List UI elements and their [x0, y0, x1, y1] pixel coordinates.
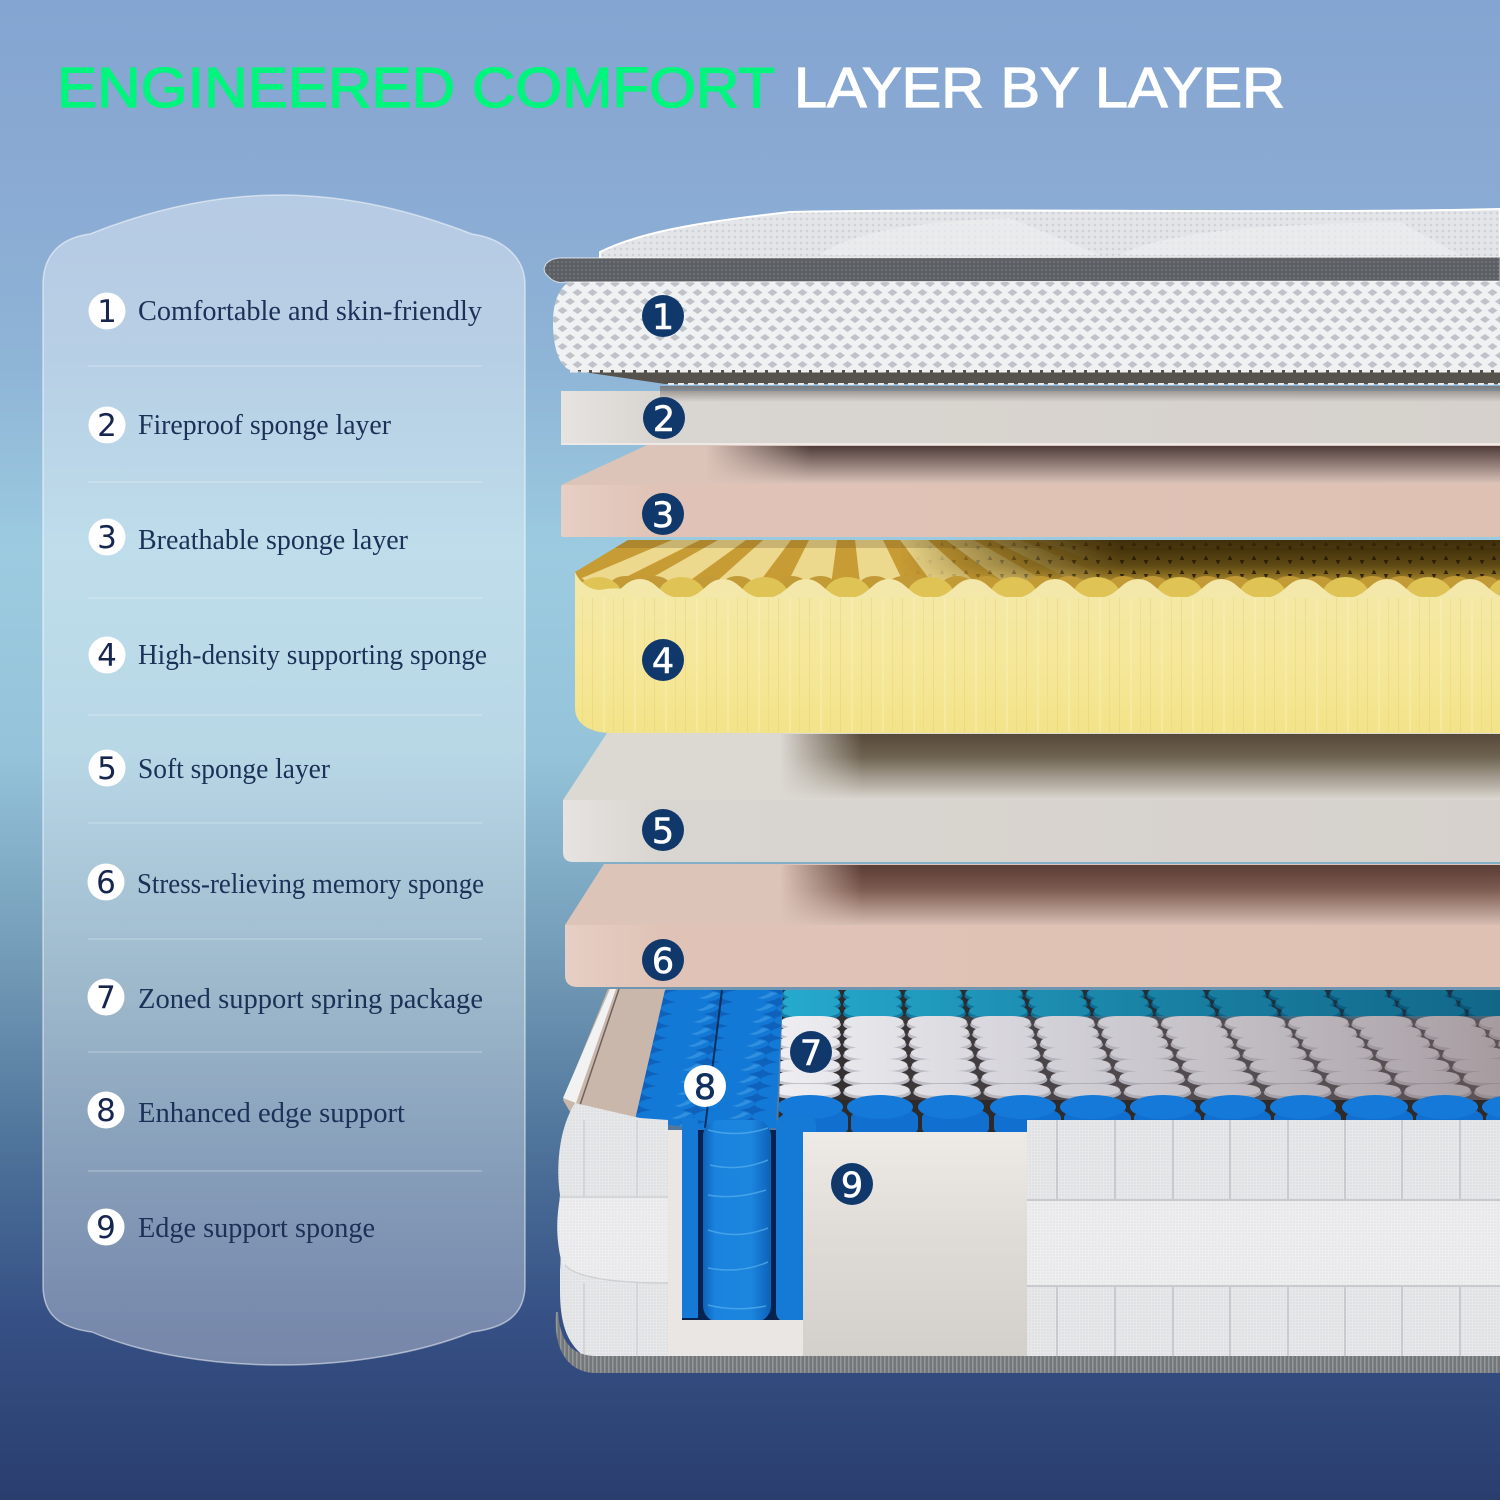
- badge 2: 2: [653, 400, 675, 440]
- legend item 5: 5: [97, 751, 117, 787]
- badge 8: 8: [694, 1068, 716, 1108]
- legend item 5: Soft sponge layer: [138, 754, 331, 785]
- badge 6: 6: [652, 942, 674, 982]
- legend item 5: [88, 750, 331, 787]
- layer 2: fireproof sponge: [561, 386, 1500, 445]
- badge 8: [684, 1065, 726, 1108]
- blue front spring row: [778, 1095, 1500, 1132]
- badge 5: [642, 809, 684, 852]
- legend item 3: [88, 518, 409, 556]
- legend item 8: [88, 1092, 405, 1129]
- badge 3: 3: [652, 496, 674, 536]
- badge 9: [831, 1163, 873, 1206]
- badge 4: 4: [652, 642, 674, 682]
- badge 1: 1: [652, 298, 674, 338]
- layer 4: high-density yellow foam: [530, 538, 1500, 733]
- badge 5: 5: [652, 812, 674, 852]
- legend item 9: 9: [96, 1210, 116, 1246]
- layer 3: breathable sponge: [561, 445, 1500, 537]
- exposed blue springs: [682, 1115, 816, 1322]
- edge support springs, rear: [635, 990, 783, 1130]
- badge 7: [790, 1031, 832, 1074]
- legend item 1: Comfortable and skin-friendly: [138, 296, 482, 327]
- badge 6: [642, 939, 684, 982]
- right fabric border: [1027, 1120, 1500, 1357]
- bottom piping: [556, 1312, 1500, 1373]
- zoned pocket springs: [777, 986, 1500, 1140]
- white foam floor: [668, 1320, 1030, 1357]
- legend item 4: 4: [97, 638, 117, 674]
- badge 1: [642, 295, 684, 338]
- layer 7-9: spring base: [556, 986, 1500, 1373]
- badge 4: [642, 639, 684, 682]
- left fabric border: [557, 1103, 682, 1357]
- title: [57, 56, 1285, 120]
- badge 2: [643, 397, 685, 440]
- title: ENGINEERED COMFORT: [57, 56, 775, 120]
- mattress number badges: [642, 295, 873, 1206]
- layer 6: memory sponge: [565, 864, 1500, 987]
- panel: layer legend: [43, 195, 525, 1365]
- legend item 2: 2: [97, 408, 117, 444]
- edge support sponge block: [803, 1132, 1027, 1357]
- badge 9: 9: [841, 1166, 863, 1206]
- legend item 2: Fireproof sponge layer: [138, 410, 392, 441]
- legend item 3: 3: [97, 520, 117, 556]
- teal spring rows: [782, 990, 1500, 1020]
- layer 1: mesh top cover: [544, 209, 1500, 384]
- legend item 3: Breathable sponge layer: [138, 525, 409, 556]
- legend item 9: Edge support sponge: [138, 1213, 375, 1244]
- white and grey spring rows: [778, 1015, 1500, 1100]
- legend item 8: 8: [96, 1093, 116, 1129]
- badge 7: 7: [800, 1034, 822, 1074]
- title: LAYER BY LAYER: [794, 56, 1285, 120]
- badge 3: [642, 493, 684, 536]
- layer 5: soft sponge: [563, 733, 1500, 862]
- legend item 2: [88, 406, 392, 444]
- legend item 4: High-density supporting sponge: [138, 640, 487, 671]
- legend item 6: Stress-relieving memory sponge: [137, 869, 484, 900]
- legend item 7: 7: [96, 980, 116, 1016]
- legend item 1: 1: [97, 294, 117, 330]
- legend item 6: 6: [96, 865, 116, 901]
- legend item 8: Enhanced edge support: [138, 1098, 405, 1129]
- side wall and inner beige edge: [563, 989, 666, 1120]
- legend item 7: Zoned support spring package: [138, 984, 483, 1015]
- legend item 9: [88, 1208, 375, 1246]
